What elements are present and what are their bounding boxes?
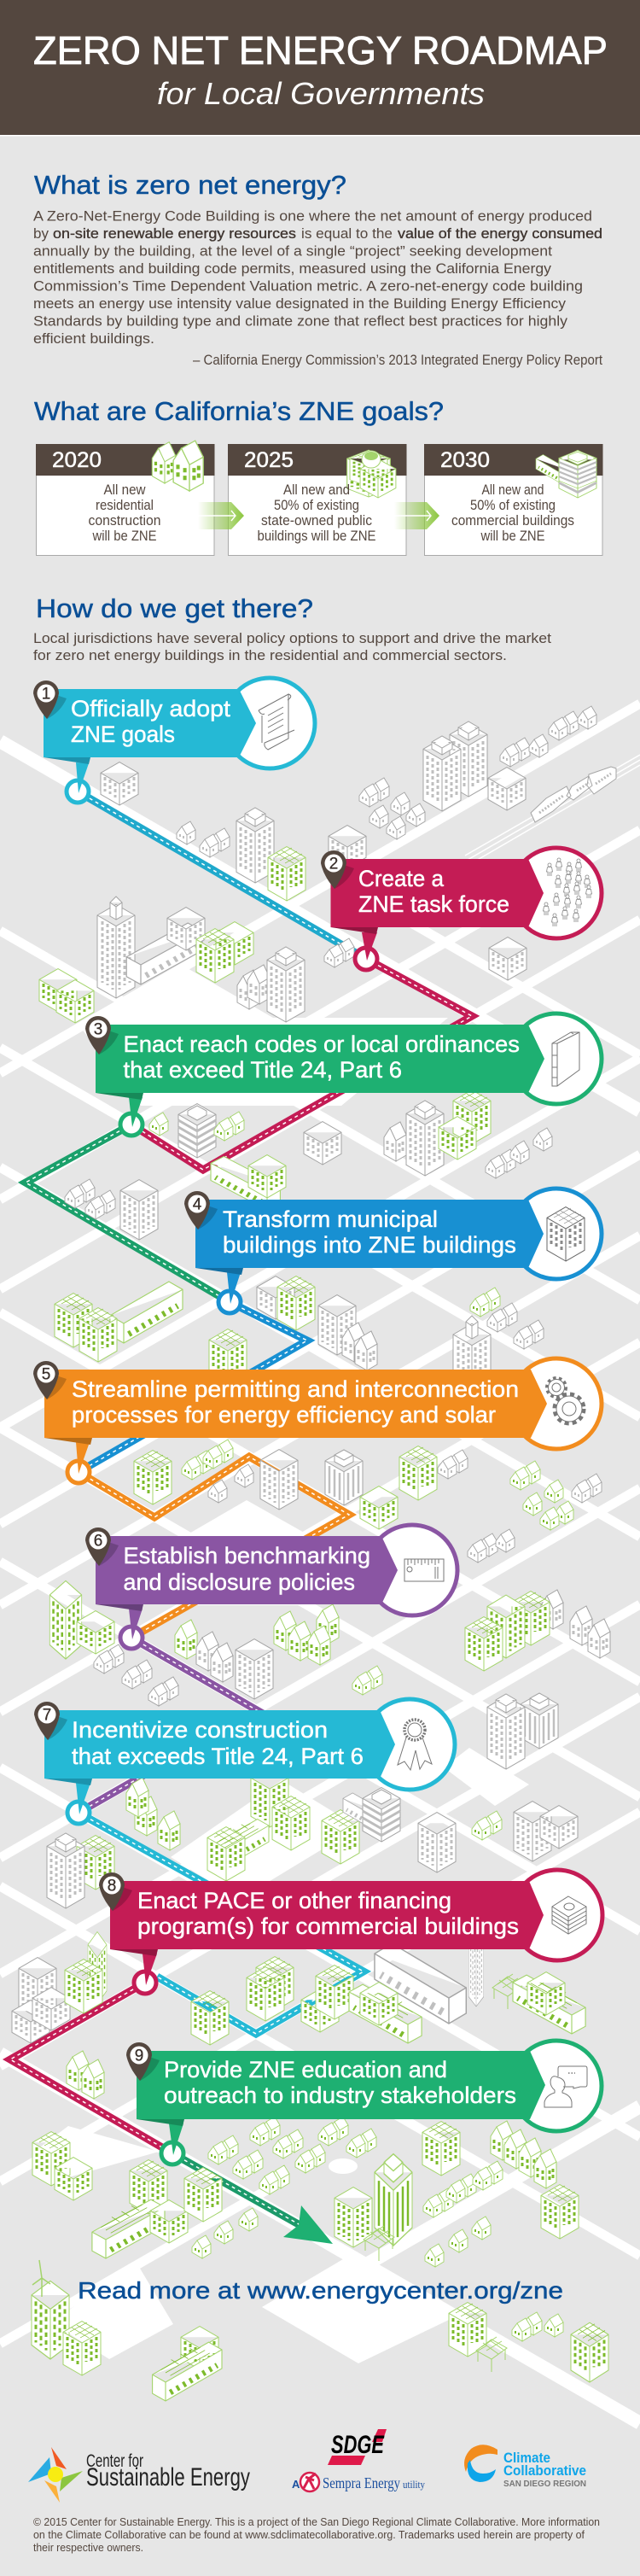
step 5 label <box>72 1376 519 1428</box>
banner tail <box>129 1097 143 1127</box>
pin 3 <box>85 1016 119 1054</box>
definition text block: efficient buildings. <box>33 330 154 347</box>
step 6 label <box>123 1543 370 1595</box>
icon: ruler <box>404 1559 444 1581</box>
heading: how do we get there: How do we get there? <box>36 593 313 623</box>
definition text block: Standards by building type and climate zone that reflect best practices for highly <box>33 313 568 330</box>
intro text: Local jurisdictions have several policy options to support and drive the market <box>33 630 551 646</box>
footer text: their respective owners. <box>33 2542 143 2554</box>
step 1 label: Officially adopt <box>71 696 231 721</box>
logo: Center for Sustainable Energy <box>28 2447 250 2503</box>
logo: SDGE: Sempra Energy <box>323 2474 400 2491</box>
definition text block: A Zero-Net-Energy Code Building is one where the net amount of energy produced <box>33 208 592 224</box>
street map background <box>0 704 640 2423</box>
step 7 banner <box>34 1699 455 1824</box>
panel: 2020 goal: All new <box>104 482 146 498</box>
banner ribbon <box>331 859 544 927</box>
definition text block <box>33 208 602 368</box>
icon: commercial buildings <box>536 450 596 498</box>
icon: houses <box>152 441 203 491</box>
banner ribbon <box>195 1200 544 1268</box>
route node <box>218 1291 241 1313</box>
step 6 banner <box>85 1525 457 1649</box>
icon circle <box>511 1013 602 1104</box>
heading: what is zero net energy: What is zero net energy? <box>34 170 346 200</box>
step 1 banner <box>33 678 315 803</box>
icon circle <box>224 678 315 768</box>
footer text: © 2015 Center for Sustainable Energy. This is a project of the San Diego Regional Climate Collaborative. More information <box>33 2516 600 2528</box>
step 3 label: that exceed Title 24, Part 6 <box>123 1057 402 1083</box>
icon circle <box>511 848 602 938</box>
step 3 label: Enact reach codes or local ordinances <box>123 1031 520 1057</box>
icon: book <box>552 1032 579 1086</box>
icon: municipal building <box>547 1207 585 1261</box>
city buildings: section 7-8 <box>12 1677 585 2045</box>
footer text <box>33 2516 600 2554</box>
route leg 5 <box>79 1457 349 1638</box>
step 3 banner <box>85 1013 602 1136</box>
route leg 9 <box>172 2153 303 2227</box>
route leg 4 <box>79 1302 307 1472</box>
panel: 2025 goal: 2025 <box>244 448 294 472</box>
icon circle <box>511 2041 602 2131</box>
definition text block: value of the energy consumed <box>398 225 602 242</box>
banner ribbon <box>96 1536 398 1604</box>
panel: 2020 goal: construction <box>89 512 160 529</box>
icon: gears <box>547 1378 584 1423</box>
pin 1 <box>33 681 67 719</box>
banner tail <box>76 1442 90 1474</box>
step 9 label: outreach to industry stakeholders <box>164 2082 516 2108</box>
city buildings: final section <box>32 2051 608 2401</box>
step 8 banner <box>99 1870 602 1994</box>
step 1 label: ZNE goals <box>71 721 175 747</box>
panel: 2030 goal: commercial buildings <box>451 512 574 529</box>
step 5 label: Streamline permitting and interconnection <box>72 1376 519 1402</box>
logo: Climate Collaborative: Climate <box>503 2450 550 2466</box>
route leg 3 <box>26 1124 230 1302</box>
step 6 label: Establish benchmarking <box>123 1543 370 1568</box>
logo: SDGE: SDGE <box>331 2431 385 2459</box>
logo: Climate Collaborative <box>464 2445 586 2489</box>
pin 6 <box>85 1527 119 1566</box>
banner ribbon <box>44 689 256 757</box>
route leg 2 <box>131 959 472 1170</box>
step 4 label <box>223 1206 516 1258</box>
city buildings: section 5-6 <box>49 1440 610 1706</box>
arrow: 2025 to 2030 <box>394 502 439 529</box>
roadmap route <box>10 791 472 2244</box>
route leg 8 <box>10 1983 172 2153</box>
step 7 label: that exceeds Title 24, Part 6 <box>72 1744 364 1769</box>
route node <box>161 2142 183 2164</box>
logo: Climate Collaborative: Collaborative <box>503 2462 586 2479</box>
icon circle <box>512 1870 602 1960</box>
definition text block: annually by the building, at the level of a single “project” seeking development <box>33 242 552 260</box>
logo: Climate Collaborative: SAN DIEGO REGION <box>503 2480 586 2489</box>
banner ribbon <box>44 1370 547 1438</box>
route node <box>120 1627 143 1649</box>
step 8 label: Enact PACE or other financing <box>137 1888 451 1913</box>
icon: award ribbon <box>398 1720 432 1770</box>
banner tail <box>76 1783 90 1814</box>
step 3 label <box>123 1031 520 1083</box>
icon circle <box>364 1699 455 1790</box>
banner ribbon <box>110 1881 544 1949</box>
pin 6: 6 <box>94 1532 102 1551</box>
icon: person with speech bubble <box>544 2066 587 2107</box>
logo: Center for Sustainable Energy: Sustainable Energy <box>86 2463 250 2491</box>
route leg 6 <box>79 1638 257 1813</box>
icon: people crowd <box>543 858 592 926</box>
arrow: route end <box>283 2205 333 2244</box>
pin 4: 4 <box>193 1195 202 1214</box>
banner ribbon <box>44 1710 395 1779</box>
step 1 label <box>71 696 231 747</box>
step 6 label: and disclosure policies <box>123 1569 355 1595</box>
panel: 2030 goal: 50% of existing <box>470 497 556 513</box>
panel: 2025 goal: state-owned public <box>261 512 372 529</box>
pin 5 <box>33 1361 67 1399</box>
subtitle: for Local Governments <box>157 76 485 111</box>
step 2 label: Create a <box>358 866 445 891</box>
panel: 2030 goal: will be ZNE <box>480 528 544 544</box>
pin 9 <box>126 2042 160 2081</box>
pin 5: 5 <box>42 1366 50 1383</box>
panel: 2030 goal <box>424 444 602 555</box>
pin 2 <box>321 850 354 889</box>
banner ribbon <box>137 2051 545 2119</box>
banner tail <box>169 2123 183 2155</box>
definition text block: is equal to the <box>301 225 393 242</box>
panel: 2020 goal: residential <box>96 497 154 513</box>
step 4 banner <box>184 1189 602 1313</box>
read more link: Read more at www.energycenter.org/zne <box>78 2277 563 2304</box>
step 8 label: program(s) for commercial buildings <box>137 1913 519 1939</box>
pin 7: 7 <box>43 1706 51 1725</box>
step 9 label: Provide ZNE education and <box>164 2057 447 2082</box>
pin 4 <box>184 1191 218 1230</box>
cul-de-sac <box>329 2158 358 2174</box>
icon: star <box>28 2447 83 2503</box>
intro text: for zero net energy buildings in the residential and commercial sectors. <box>33 647 507 663</box>
step 8 label <box>137 1888 519 1939</box>
pin 7 <box>34 1702 67 1740</box>
panel: 2020 goal <box>36 441 215 555</box>
logo: SDGE: A <box>292 2478 300 2491</box>
panel: 2025 goal: 50% of existing <box>274 497 359 513</box>
step 4 label: buildings into ZNE buildings <box>223 1232 516 1258</box>
footer text: on the Climate Collaborative can be found at www.sdclimatecollaborative.org. Trademarks used herein are property of <box>33 2529 585 2541</box>
panel: 2025 goal <box>228 444 406 555</box>
icon: stack of money <box>552 1896 586 1934</box>
step 7 label: Incentivize construction <box>72 1717 328 1743</box>
step 2 label <box>358 866 509 917</box>
panel: 2030 goal: All new and <box>481 482 544 498</box>
banner tail <box>143 1954 157 1985</box>
city buildings: section 3-4 <box>55 1090 552 1417</box>
route node <box>67 780 89 803</box>
definition text block: meets an energy use intensity value designated in the Building Energy Efficiency <box>33 295 567 312</box>
route node <box>134 1971 156 1994</box>
definition text block: on-site renewable energy resources <box>53 225 296 242</box>
banner tail <box>76 762 89 793</box>
definition text block: by <box>33 225 49 242</box>
pin 1: 1 <box>42 685 50 704</box>
definition text block: entitlements and building code permits, measured using the California Energy <box>33 260 552 277</box>
step 7 label <box>72 1717 364 1769</box>
banner tail <box>129 1609 143 1639</box>
icon circle <box>367 1525 457 1615</box>
step 9 label <box>164 2057 516 2108</box>
pin 3: 3 <box>94 1021 102 1038</box>
step 2 label: ZNE task force <box>358 891 509 917</box>
pin 8 <box>99 1872 132 1911</box>
route leg 7 <box>79 1813 364 2034</box>
step 4 label: Transform municipal <box>223 1206 438 1232</box>
panel: 2025 goal: All new and <box>283 482 350 498</box>
icon: train <box>531 767 616 822</box>
title: ZERO NET ENERGY ROADMAP <box>33 28 608 73</box>
icon circle <box>511 1358 602 1449</box>
route node <box>67 1461 90 1483</box>
panel: 2025 goal: buildings will be ZNE <box>258 528 375 544</box>
route node <box>120 1113 143 1136</box>
panel: 2020 goal: will be ZNE <box>92 528 157 544</box>
city buildings: upper section <box>39 706 616 1023</box>
banner tail <box>227 1272 241 1304</box>
logo: SDGE: utility <box>403 2478 425 2491</box>
step 5 label: processes for energy efficiency and solar <box>72 1402 496 1428</box>
pin 8: 8 <box>108 1877 116 1895</box>
icon circle <box>511 1189 602 1279</box>
icon: capitol building <box>347 450 396 498</box>
icon: scroll <box>259 694 294 750</box>
route node <box>355 948 377 970</box>
heading: california goals: What are California’s ZNE goals? <box>34 396 444 426</box>
route leg 1 <box>78 791 366 959</box>
step 5 banner <box>33 1358 602 1483</box>
route node <box>67 1802 90 1824</box>
logo: Center for Sustainable Energy: Center for <box>86 2451 143 2471</box>
step 9 banner <box>126 2041 602 2164</box>
definition text block: Commission’s Time Dependent Valuation metric. A zero-net-energy code building <box>33 278 583 294</box>
banner ribbon <box>96 1025 544 1093</box>
pin 2: 2 <box>329 856 338 873</box>
header band <box>0 0 640 137</box>
arrow: 2020 to 2025 <box>198 502 244 529</box>
pin 9: 9 <box>135 2047 143 2065</box>
panel: 2020 goal: 2020 <box>52 448 102 472</box>
step 2 banner <box>321 848 602 970</box>
logo: SDGE <box>292 2429 425 2491</box>
icon: wind turbine <box>32 2260 50 2297</box>
banner tail <box>362 932 377 961</box>
panel: 2030 goal: 2030 <box>440 448 490 472</box>
intro text <box>33 630 551 663</box>
